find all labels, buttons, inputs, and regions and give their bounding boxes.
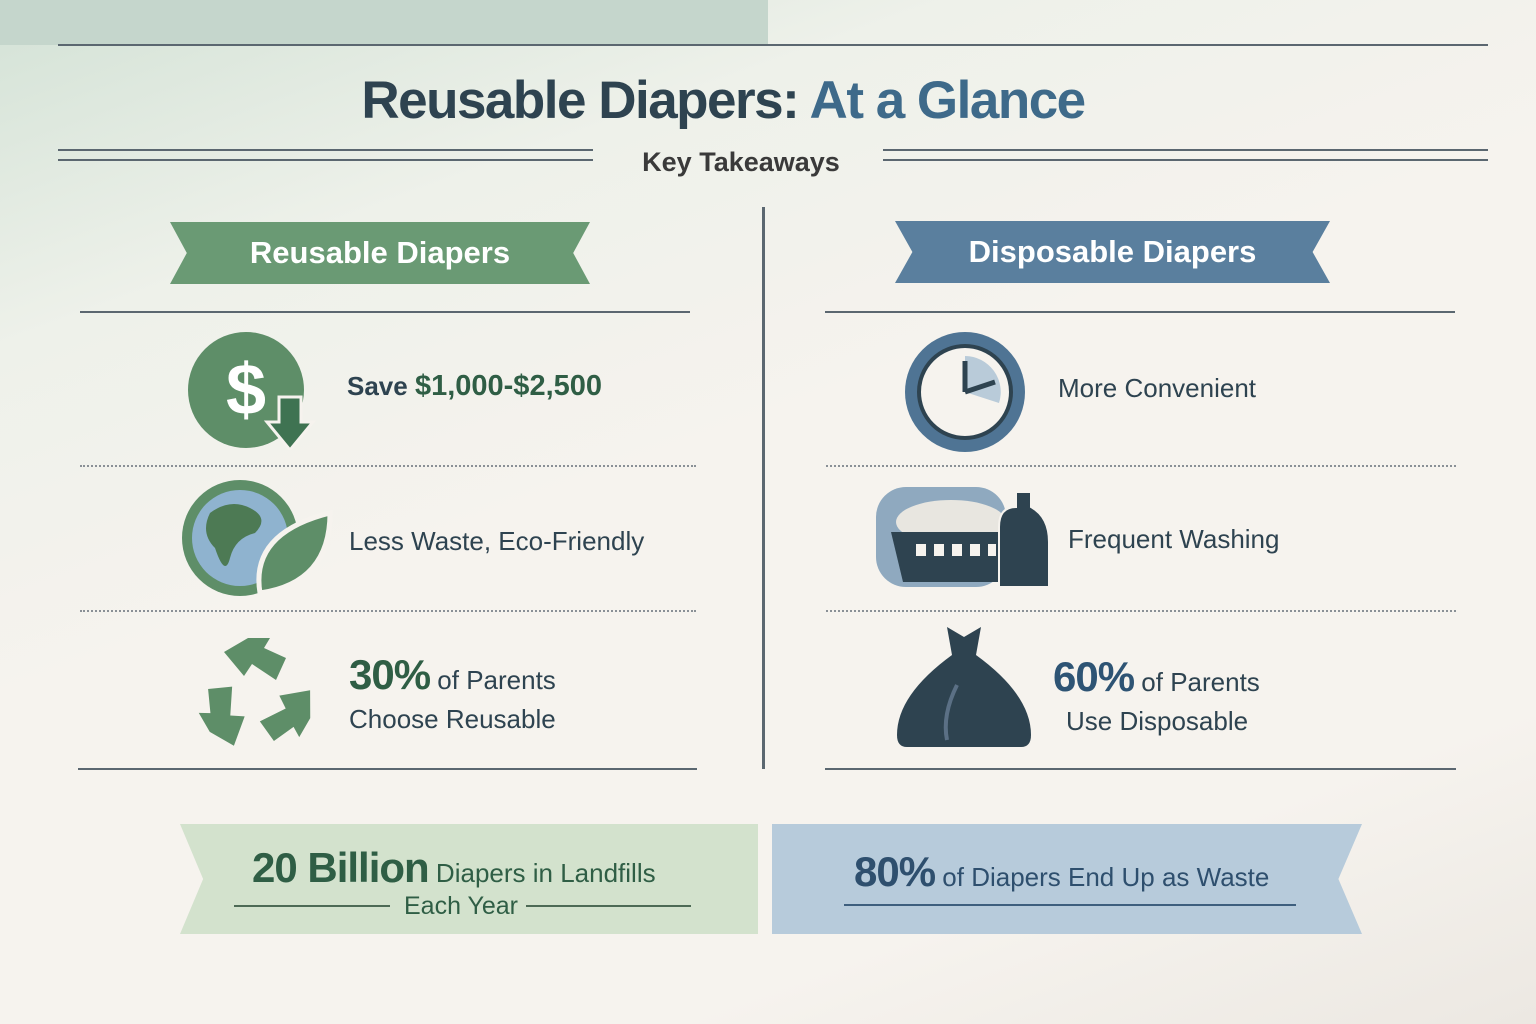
text: 30%: 30% of Parents	[349, 651, 556, 698]
icon: clock	[905, 332, 1025, 452]
text: less waste: Less Waste, Eco-Friendly	[349, 526, 644, 556]
text: save: Save $1,000-$2,500	[347, 370, 602, 402]
banner: 20 billion: Each Year	[404, 892, 518, 920]
title: Reusable Diapers: At a Glance	[361, 71, 1085, 130]
icon: laundry	[876, 487, 1048, 587]
banner: reusable: Reusable Diapers	[250, 235, 510, 270]
text: 60%: 60% of Parents	[1053, 653, 1260, 700]
banner: reusable	[170, 222, 590, 284]
icon: recycle	[198, 638, 310, 746]
text: Choose Reusable	[349, 704, 556, 734]
banner: disposable	[895, 221, 1330, 283]
banner: 80%	[772, 824, 1362, 934]
text: washing: Frequent Washing	[1068, 524, 1279, 554]
banner: 20 billion	[180, 824, 758, 934]
icon: dollar	[188, 332, 310, 448]
banner: 20 billion: 20 Billion Diapers in Landfills	[252, 844, 656, 891]
banner: disposable: Disposable Diapers	[969, 234, 1256, 269]
text: convenient: More Convenient	[1058, 373, 1256, 403]
icon: dollar: $	[226, 350, 266, 430]
icon: globe leaf	[182, 480, 328, 596]
text: Use Disposable	[1066, 706, 1248, 736]
subtitle: Key Takeaways	[642, 147, 840, 177]
banner: 80%: 80% of Diapers End Up as Waste	[854, 848, 1269, 895]
icon: trash bag	[897, 627, 1031, 747]
